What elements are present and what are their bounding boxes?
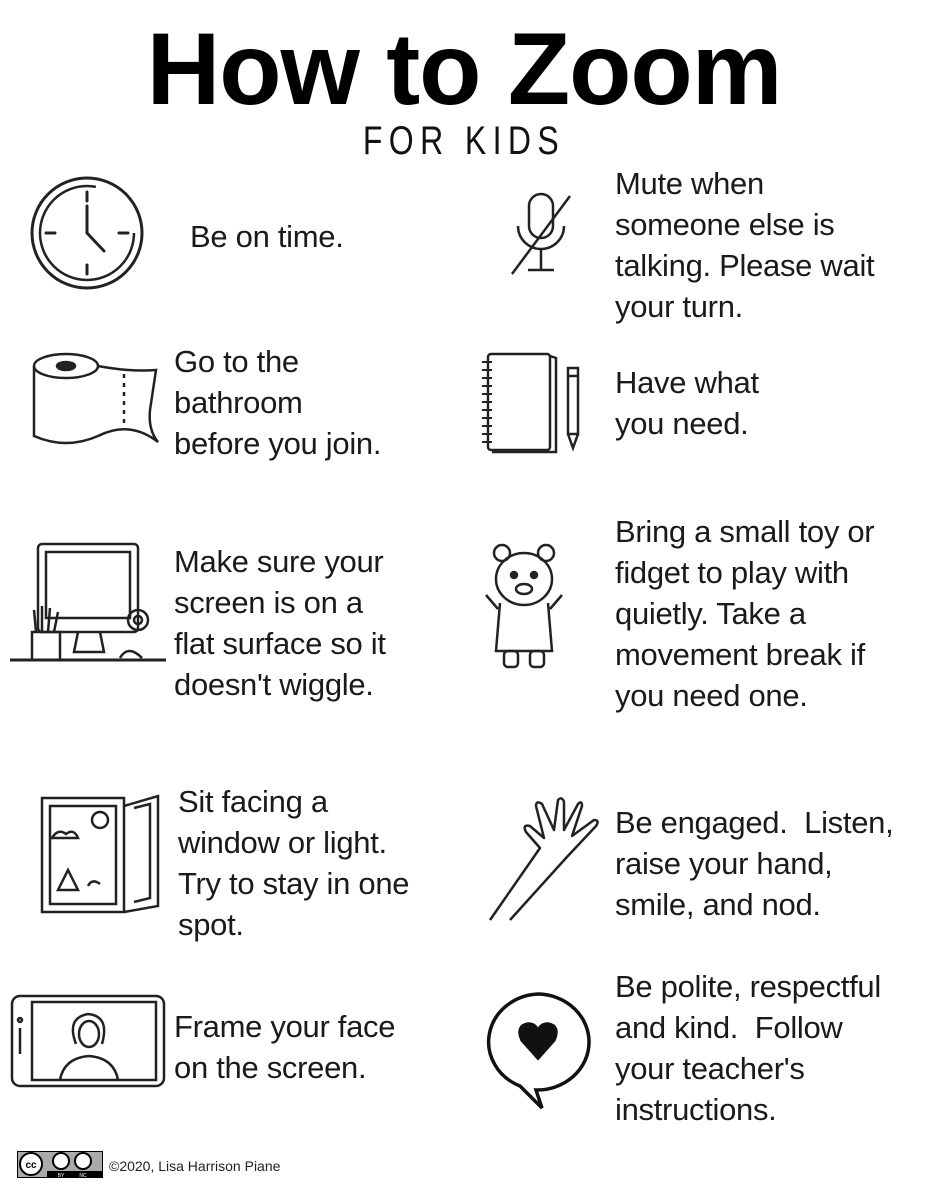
text: frame face [174, 1009, 395, 1085]
text: mute: talking. Please wait [615, 248, 874, 283]
text: be engaged: Be engaged. Listen, [615, 805, 893, 840]
text: be polite: Be polite, respectful [615, 969, 881, 1004]
text: small toy: quietly. Take a [615, 596, 806, 631]
text: be polite: and kind. Follow [615, 1010, 843, 1045]
icon: tablet with face [10, 994, 166, 1088]
text: have what you need [615, 365, 759, 441]
text: flat surface: screen is on a [174, 585, 363, 620]
icon: clock [30, 176, 144, 290]
text: mute: someone else is [615, 207, 835, 242]
text: small toy: fidget to play with [615, 555, 849, 590]
title: How to Zoom [147, 12, 781, 126]
footer: license badge [17, 1151, 103, 1178]
text: window [178, 784, 409, 942]
text: small toy: movement break if [615, 637, 865, 672]
text: be polite [615, 969, 881, 1127]
text: bathroom: Go to the [174, 344, 299, 379]
text: window: Sit facing a [178, 784, 328, 819]
text: window: window or light. [178, 825, 387, 860]
text: mute [615, 166, 874, 324]
text: mute: Mute when [615, 166, 764, 201]
icon: speech bubble with heart [486, 992, 591, 1110]
icon: notebook and pencil [482, 352, 580, 454]
icon: teddy bear [485, 544, 563, 668]
text: be polite: your teacher's [615, 1051, 805, 1086]
icon: raised hand [489, 797, 599, 921]
icon: toilet paper [32, 352, 159, 444]
subtitle: FOR KIDS [363, 119, 565, 163]
footer: copyright: ©2020, Lisa Harrison Piane [109, 1158, 280, 1174]
text: be engaged: raise your hand, [615, 846, 832, 881]
text: be polite: instructions. [615, 1092, 776, 1127]
text: mute: your turn. [615, 289, 743, 324]
text: have what you need: you need. [615, 406, 748, 441]
text: bathroom: before you join. [174, 426, 381, 461]
icon: window [40, 794, 160, 914]
text: frame face: Frame your face [174, 1009, 395, 1044]
text: small toy: you need one. [615, 678, 808, 713]
text: small toy: Bring a small toy or [615, 514, 874, 549]
footer: license badge: cc [25, 1160, 37, 1171]
icon: computer on desk [10, 542, 166, 662]
text: be engaged [615, 805, 893, 922]
text: be engaged: smile, and nod. [615, 887, 821, 922]
text: flat surface: Make sure your [174, 544, 383, 579]
text: flat surface: doesn't wiggle. [174, 667, 374, 702]
text: frame face: on the screen. [174, 1050, 366, 1085]
text: have what you need: Have what [615, 365, 759, 400]
icon: muted microphone [511, 192, 571, 275]
text: small toy [615, 514, 874, 713]
text: flat surface: flat surface so it [174, 626, 386, 661]
text: window: Try to stay in one [178, 866, 409, 901]
text: be on time: Be on time. [190, 219, 344, 254]
text: window: spot. [178, 907, 244, 942]
text: flat surface [174, 544, 386, 702]
text: bathroom: bathroom [174, 385, 303, 420]
text: bathroom [174, 344, 381, 461]
